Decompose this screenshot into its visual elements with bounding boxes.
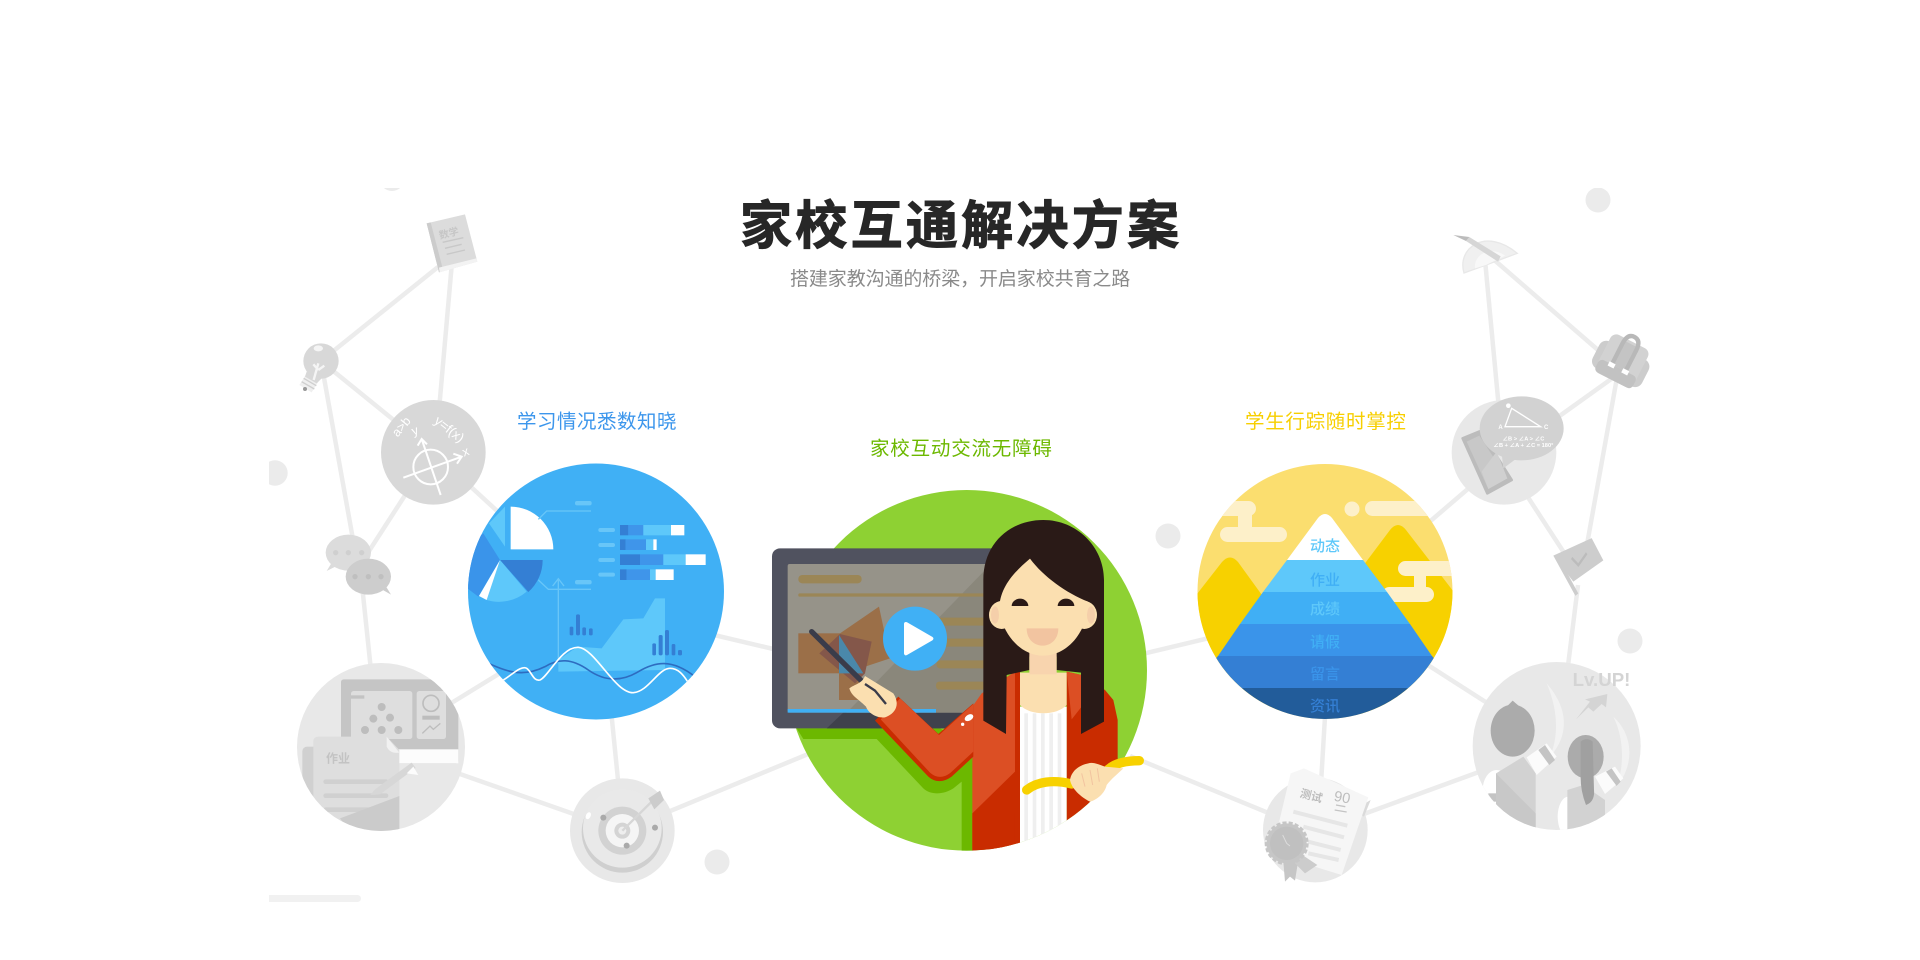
icon: math circle: a>b xyxy=(389,414,414,440)
icon: flag xyxy=(1553,538,1603,596)
icon: level up students circle xyxy=(1473,662,1641,837)
monitor xyxy=(772,548,1002,728)
panel: green teacher circle xyxy=(772,490,1147,853)
clouds xyxy=(1220,501,1452,602)
jacket xyxy=(972,672,1118,851)
area chart xyxy=(558,598,665,672)
left side icons, lower xyxy=(297,535,675,883)
open book xyxy=(1027,761,1139,790)
label: home-school: 家校互动交流无障碍 xyxy=(870,438,1053,460)
chest xyxy=(1020,673,1067,713)
icon: homework circle: 作业 xyxy=(326,750,350,765)
icon: book xyxy=(427,214,477,272)
icon: phone circle: ∠B > ∠A > ∠C xyxy=(1502,435,1544,442)
icon: target circle xyxy=(570,778,675,883)
horizontal stacked bars xyxy=(575,501,706,584)
icon: backpack xyxy=(1592,334,1650,388)
pie chart xyxy=(465,507,553,602)
icon: test paper circle: 90 xyxy=(1333,789,1351,807)
icon: math circle: y=f(x) xyxy=(431,413,467,445)
teacher figure xyxy=(812,520,1139,853)
pyramid labels: 动态 xyxy=(1310,537,1340,555)
icon: phone circle xyxy=(1452,396,1564,505)
pyramid labels: 资讯 xyxy=(1310,698,1340,715)
pyramid labels: 作业 xyxy=(1310,572,1340,589)
icon: level up students circle: Lv.UP! xyxy=(1573,669,1630,690)
icon: light bulb xyxy=(299,343,339,392)
play button xyxy=(883,607,947,671)
hand with pointer xyxy=(849,676,897,717)
icon: homework circle xyxy=(297,663,465,833)
pyramid labels: 留言 xyxy=(1310,666,1340,683)
icon: book: 数学 xyxy=(438,224,460,242)
icon: test paper circle xyxy=(1263,768,1371,882)
network background xyxy=(260,166,1659,902)
subtitle: 搭建家教沟通的桥梁，开启家校共育之路 xyxy=(790,268,1130,290)
right side icons, lower xyxy=(1263,662,1641,882)
decorative dots xyxy=(260,166,1642,902)
wave lines xyxy=(478,647,695,693)
connector lines xyxy=(538,511,591,663)
face xyxy=(989,559,1097,656)
icon: phone circle: C xyxy=(1544,425,1549,431)
small bar charts xyxy=(570,614,682,655)
label: tracking: 学生行踪随时掌控 xyxy=(1245,411,1407,433)
pyramid labels: 请假 xyxy=(1310,634,1340,651)
right side icons, upper xyxy=(1452,235,1659,505)
icon: math circle: x xyxy=(460,444,472,459)
hand holding book xyxy=(1070,763,1123,802)
panel: yellow pyramid circle xyxy=(1190,464,1468,723)
title: 家校互通解决方案 xyxy=(740,198,1182,256)
icon: math circle xyxy=(381,400,486,505)
connecting lines xyxy=(321,258,1621,831)
label: learning: 学习情况悉数知晓 xyxy=(517,411,677,433)
icon: phone circle: A xyxy=(1498,425,1503,431)
shadow under monitor and arm xyxy=(797,728,973,851)
pyramid labels xyxy=(1310,537,1340,715)
hair xyxy=(983,520,1104,734)
pyramid layers xyxy=(1216,514,1434,719)
pointer stick xyxy=(812,632,867,686)
blouse xyxy=(1020,707,1067,853)
arm and sleeve xyxy=(875,697,975,781)
panel: blue data circle xyxy=(465,464,724,719)
neck xyxy=(1029,652,1057,674)
left side icons, upper xyxy=(299,214,486,505)
icon: chat bubbles xyxy=(326,535,391,595)
icon: protractor and pencil xyxy=(1453,235,1517,273)
icon: test paper circle: 测试 xyxy=(1299,786,1325,806)
icon: math circle: y xyxy=(410,423,421,438)
icon: phone circle: ∠B + ∠A + ∠C = 180° xyxy=(1493,442,1554,449)
pyramid labels: 成绩 xyxy=(1310,601,1340,618)
back mountains xyxy=(1190,525,1460,720)
